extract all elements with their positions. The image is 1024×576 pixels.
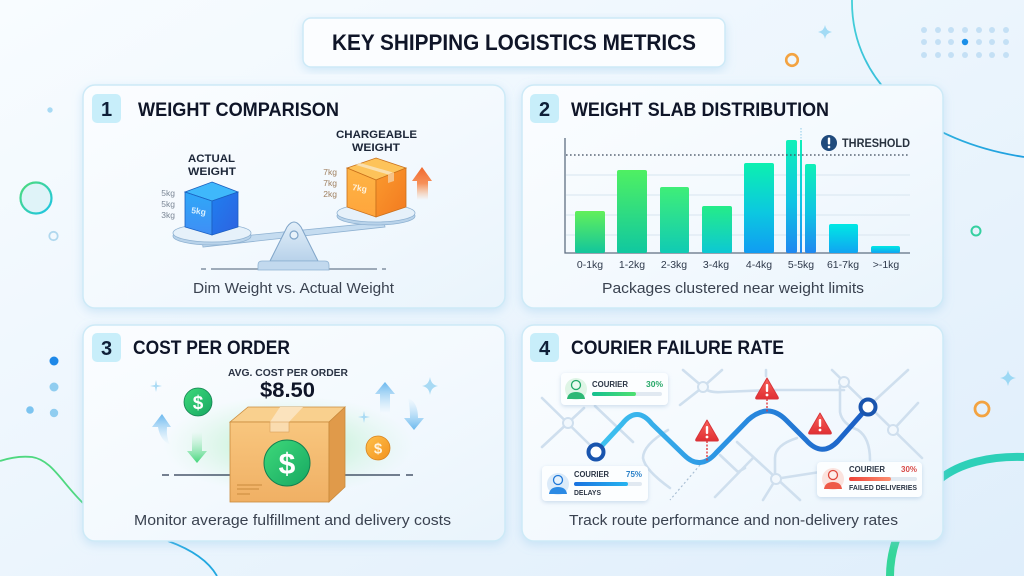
warning marker 1 <box>696 420 718 462</box>
road map <box>542 370 922 500</box>
title banner <box>303 18 725 67</box>
icon: blue up arrow right <box>375 382 395 413</box>
caption: panel 3: Monitor average fulfillment and delivery costs <box>134 512 451 529</box>
caption: panel 4: Track route performance and non-delivery rates <box>569 512 898 529</box>
number badge 1: 1 <box>101 99 112 121</box>
threshold marker <box>821 135 910 151</box>
courier card: green <box>561 373 668 405</box>
orange box: chargeable weight: 7kg <box>352 182 368 194</box>
icon: blue up arrow left <box>152 414 171 445</box>
orange box weights: 2kg <box>323 189 337 199</box>
panel 1: weight comparison <box>83 85 505 308</box>
bar chart: 5-5kg <box>788 259 814 271</box>
number badge 2: 2 <box>539 99 550 121</box>
icon: blue down arrow right <box>404 398 424 430</box>
orange box weights <box>323 167 337 199</box>
courier card: red failed deliveries: COURIER <box>849 465 885 474</box>
heading: courier failure rate: COURIER FAILURE RATE <box>571 338 784 359</box>
icon: green coin: $ <box>193 393 204 414</box>
caption: panel 1: Dim Weight vs. Actual Weight <box>193 280 395 297</box>
icon: orange coin <box>366 436 390 460</box>
bar chart: 3-4kg <box>703 259 729 271</box>
blue cube: actual weight: 5kg <box>191 205 207 217</box>
courier card: red failed deliveries: 30% <box>901 465 917 474</box>
icon: green coin <box>184 388 212 416</box>
panel 4: courier failure rate <box>522 325 943 541</box>
caption: panel 2: Packages clustered near weight limits <box>602 280 864 297</box>
number badge 3: 3 <box>101 338 112 360</box>
bar chart: >-1kg <box>873 259 899 271</box>
balance scale <box>173 204 415 270</box>
orange box weights: 7kg <box>323 167 337 177</box>
bar chart: 61-7kg <box>827 259 859 271</box>
threshold marker: THRESHOLD <box>842 138 910 150</box>
warning marker 3 <box>809 413 831 434</box>
warning marker 2 <box>756 378 778 412</box>
blue cube weights: 3kg <box>161 210 175 220</box>
chargeable weight label line 2: WEIGHT <box>352 142 400 154</box>
number badge 1 <box>92 94 121 123</box>
icon: orange coin: $ <box>374 440 383 458</box>
average cost label: AVG. COST PER ORDER <box>228 368 349 379</box>
courier card: blue delays <box>542 466 648 501</box>
route start marker <box>588 444 604 460</box>
actual weight label line 2: WEIGHT <box>188 166 236 178</box>
courier card: green: 30% <box>646 380 663 389</box>
blue cube: actual weight <box>185 182 238 235</box>
courier card: blue delays: 75% <box>626 470 642 479</box>
orange box weights: 7kg <box>323 178 337 188</box>
bar chart: 4-4kg <box>746 259 772 271</box>
blue cube weights: 5kg <box>161 188 175 198</box>
number badge 4: 4 <box>539 338 551 360</box>
ground line <box>162 474 413 476</box>
icon: green down arrow <box>187 432 207 463</box>
sparkles <box>150 377 438 423</box>
actual weight label: ACTUAL <box>188 153 235 165</box>
panel 3: cost per order <box>83 325 505 541</box>
courier card: blue delays: COURIER <box>574 470 609 479</box>
title text: KEY SHIPPING LOGISTICS METRICS <box>332 30 696 55</box>
heading: weight slab distribution: WEIGHT SLAB DISTRIBUTION <box>571 100 829 121</box>
green glow <box>163 395 413 495</box>
bar chart: 2-3kg <box>661 259 687 271</box>
average cost value: $8.50 <box>260 379 315 402</box>
courier card: red failed deliveries: FAILED DELIVERIES <box>849 485 917 492</box>
bar chart: 0-1kg <box>577 259 603 271</box>
delivery route line <box>596 407 868 463</box>
number badge 2 <box>530 94 559 123</box>
orange box: chargeable weight <box>347 158 406 217</box>
courier card: red failed deliveries <box>817 462 922 497</box>
bar chart: 1-2kg <box>619 259 645 271</box>
number badge 3 <box>92 333 121 362</box>
number badge 4 <box>530 333 559 362</box>
panel 2: weight slab distribution <box>522 85 943 308</box>
chargeable weight label: CHARGEABLE <box>336 129 417 141</box>
bar chart <box>565 128 910 271</box>
blue cube weights: 5kg <box>161 199 175 209</box>
route end marker <box>860 400 876 414</box>
courier card: blue delays: DELAYS <box>574 490 601 497</box>
courier card: green: COURIER <box>592 380 628 389</box>
heading: cost per order: COST PER ORDER <box>133 338 290 359</box>
cardboard box: $ <box>279 448 296 481</box>
heading: weight comparison: WEIGHT COMPARISON <box>138 100 339 121</box>
blue cube weights <box>161 188 175 220</box>
cardboard box <box>230 407 345 502</box>
icon: up arrow <box>412 167 432 200</box>
